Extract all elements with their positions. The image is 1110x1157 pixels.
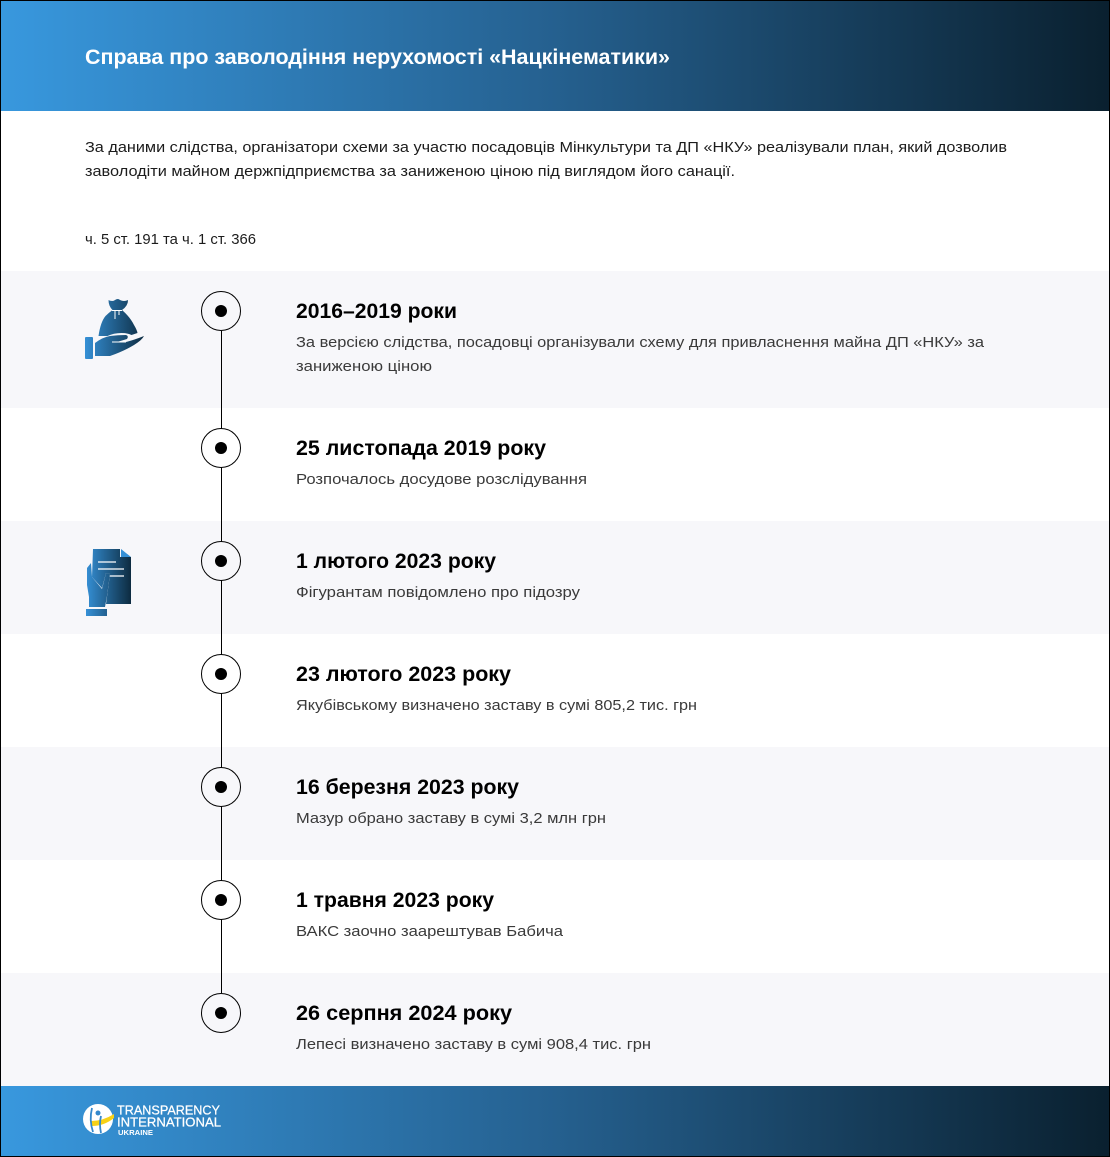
header band — [1, 1, 1109, 111]
logo: Transparency International Ukraine: INTERNATIONAL — [117, 1114, 221, 1130]
row backgrounds — [1, 271, 1109, 1086]
timeline entry: 25 листопада 2019: 25 листопада 2019 року — [296, 437, 546, 460]
timeline entry: 16 березня 2023 — [202, 768, 606, 827]
title: Справа про заволодіння нерухомості «Нацкінематики» — [85, 46, 670, 69]
timeline entry: 26 серпня 2024: 26 серпня 2024 року — [296, 1002, 512, 1025]
timeline axis — [220, 331, 222, 993]
timeline entry: 1 травня 2023 — [202, 880, 564, 940]
timeline entry: 25 листопада 2019 — [202, 428, 587, 488]
timeline entry: 2016–2019 — [202, 292, 985, 375]
intro text: За даними слідства, організатори схеми за участю посадовців Мінкультури та ДП «НКУ» реалізували план, який дозволив — [85, 139, 1007, 156]
intro text: заволодіти майном держпідприємства за заниженою ціною під виглядом його санації. — [85, 163, 735, 180]
timeline entry: 1 лютого 2023 — [202, 542, 581, 601]
timeline entry: 2016–2019: 2016–2019 роки — [296, 300, 457, 323]
timeline entry: 23 лютого 2023: 23 лютого 2023 року — [296, 663, 511, 686]
timeline entry: 26 серпня 2024: Лепесі визначено заставу в сумі 908,4 тис. грн — [296, 1036, 651, 1053]
logo: Transparency International Ukraine: TRANSPARENCY — [117, 1102, 220, 1118]
timeline entry: 1 лютого 2023: Фігурантам повідомлено про підозру — [296, 584, 581, 601]
timeline entry: 25 листопада 2019: Розпочалось досудове розслідування — [296, 471, 587, 488]
intro text — [85, 139, 1007, 180]
timeline entry: 26 серпня 2024 — [202, 994, 651, 1053]
icon: money bag on hand — [85, 299, 144, 359]
timeline entry: 1 травня 2023: 1 травня 2023 року — [296, 889, 494, 912]
timeline entry: 23 лютого 2023: Якубівському визначено заставу в сумі 805,2 тис. грн — [296, 697, 697, 714]
timeline entry: 16 березня 2023: Мазур обрано заставу в сумі 3,2 млн грн — [296, 810, 606, 827]
timeline entry: 1 травня 2023: ВАКС заочно заарештував Бабича — [296, 923, 564, 940]
footer band — [1, 1086, 1109, 1156]
timeline entry: 23 лютого 2023 — [202, 654, 697, 714]
legal articles note: ч. 5 ст. 191 та ч. 1 ст. 366 — [85, 231, 256, 248]
logo: Transparency International Ukraine — [83, 1102, 221, 1137]
timeline entry: 1 лютого 2023: 1 лютого 2023 року — [296, 550, 496, 573]
timeline entry: 2016–2019: заниженою ціною — [296, 358, 432, 375]
icon: hand holding document — [86, 549, 131, 616]
timeline entry: 2016–2019: За версією слідства, посадовці організували схему для привласнення майна ДП «НКУ» за — [296, 334, 985, 351]
logo: Transparency International Ukraine: UKRAINE — [118, 1130, 153, 1137]
timeline entry: 16 березня 2023: 16 березня 2023 року — [296, 776, 519, 799]
